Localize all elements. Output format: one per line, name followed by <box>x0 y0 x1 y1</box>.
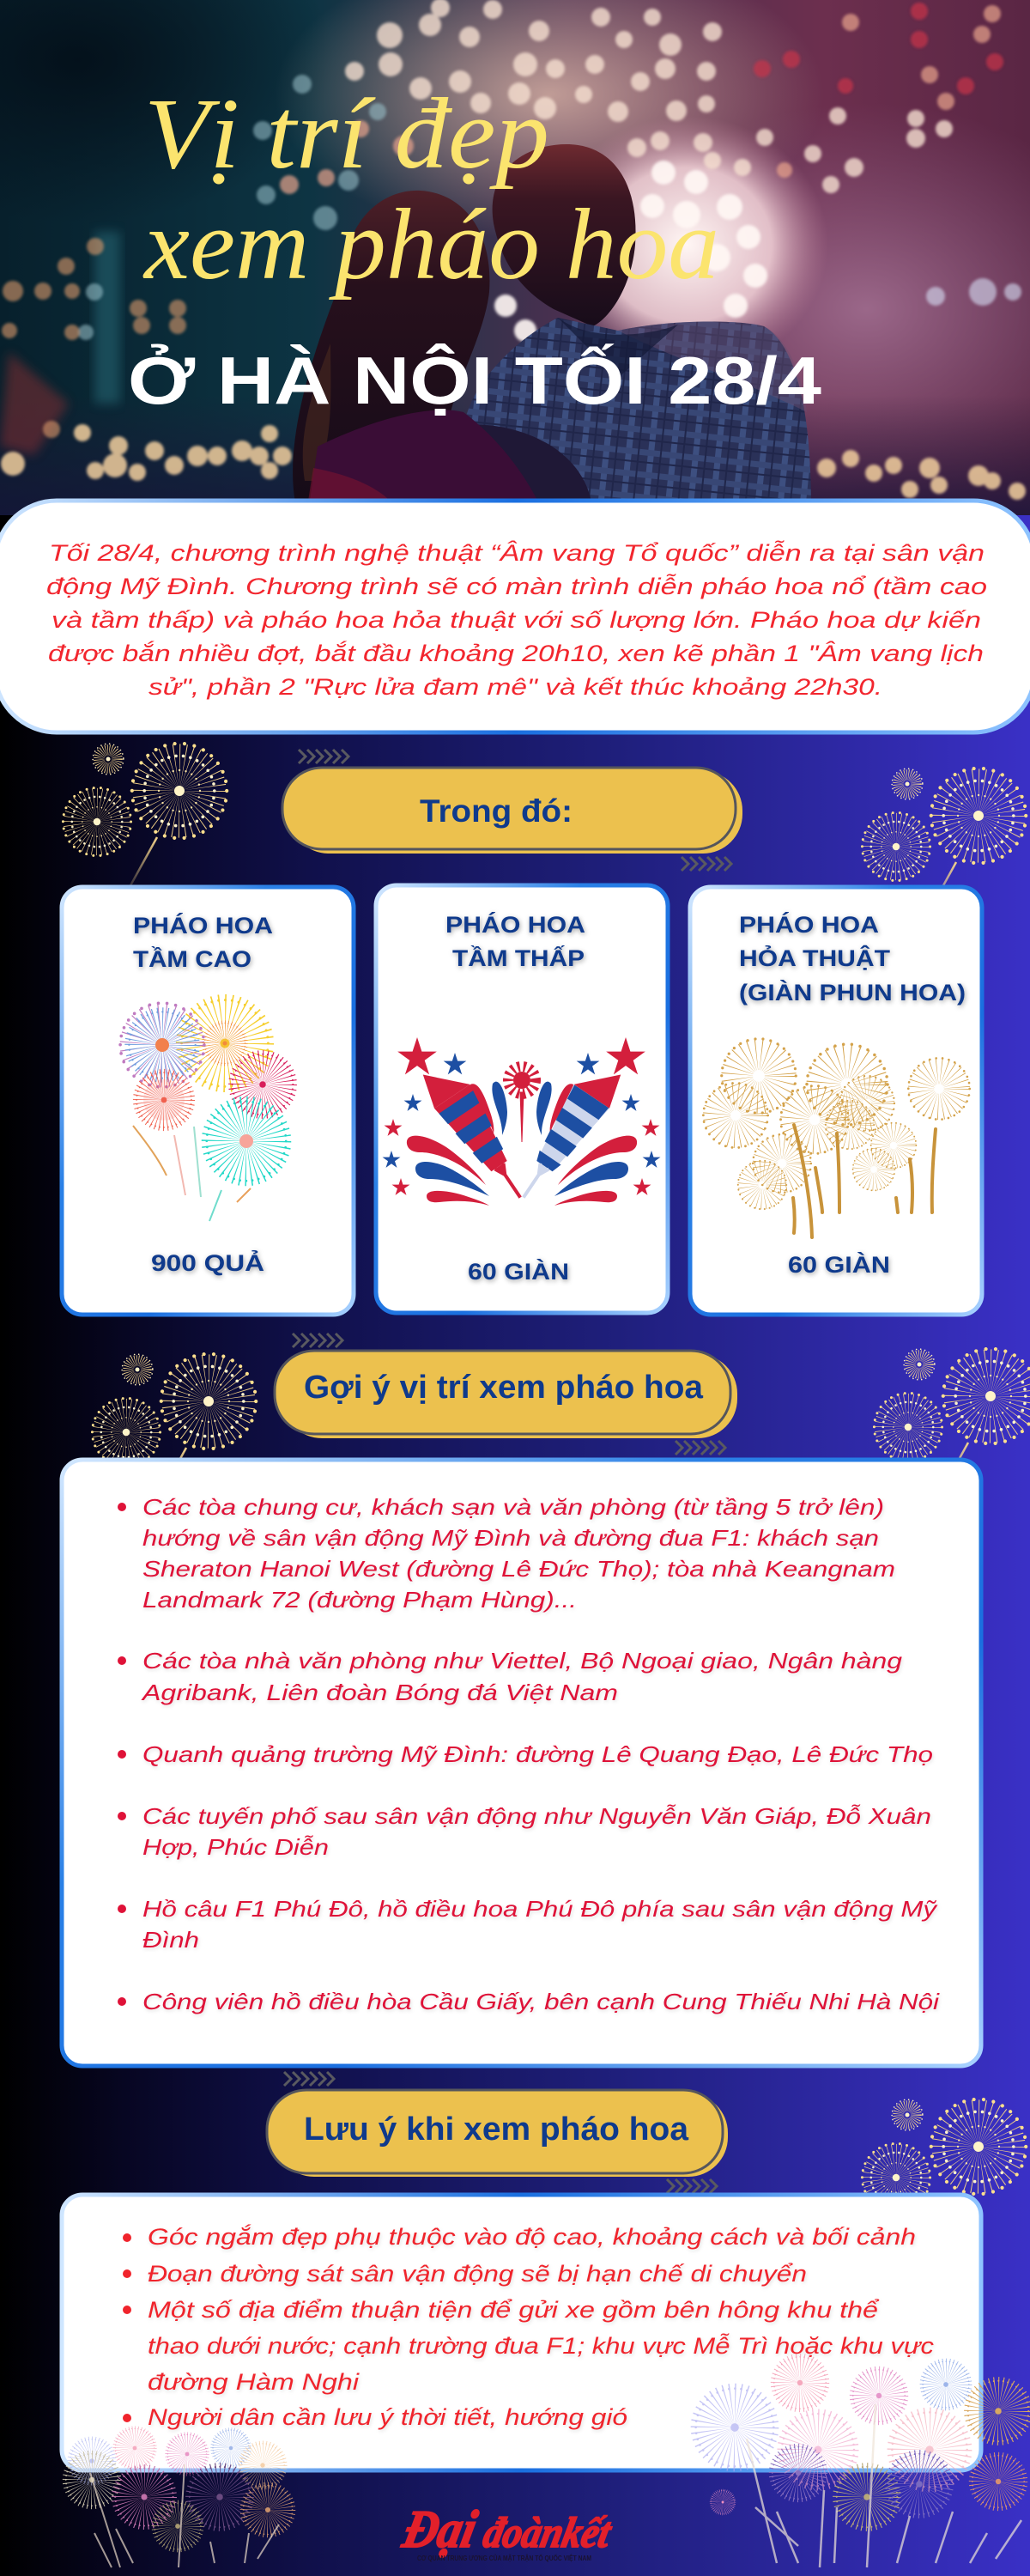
intro text: Tối 28/4, chương trình nghệ thuật “Âm vang Tổ quốc” diễn ra tại sân vận <box>49 539 985 566</box>
firework decoration: left of first pill <box>63 744 227 896</box>
location list: Agribank, Liên đoàn Bóng đá Việt Nam <box>141 1680 618 1705</box>
location list: Các tuyến phố sau sân vận động như Nguyễn Văn Giáp, Đỗ Xuân <box>142 1803 931 1829</box>
man silhouette <box>464 144 811 507</box>
logo: Đại đoàn kết: Đại đoànkết <box>397 2500 618 2559</box>
location list: Quanh quảng trường Mỹ Đình: đường Lê Quang Đạo, Lê Đức Thọ <box>142 1741 933 1767</box>
location list: Sheraton Hanoi West (đường Lê Đức Thọ); tòa nhà Keangnam <box>142 1556 895 1582</box>
card heading: PHÁO HOA <box>133 912 273 939</box>
firework decoration: right of second pill <box>874 1349 1030 1502</box>
location list: Các tòa chung cư, khách sạn và văn phòng (từ tầng 5 trở lên) <box>142 1494 884 1520</box>
intro text: động Mỹ Đình. Chương trình sẽ có màn trình diễn pháo hoa nổ (tầm cao <box>46 573 987 599</box>
fireworks cluster: bottom left <box>66 2428 293 2567</box>
heading text: Gợi ý vị trí xem pháo hoa <box>304 1370 704 1406</box>
panel: pyrotechnic fountain card <box>690 887 982 1315</box>
card heading: (GIÀN PHUN HOA) <box>739 979 966 1005</box>
notes list: thao dưới nước; cạnh trường đua F1; khu vực Mễ Trì hoặc khu vực <box>148 2332 935 2359</box>
notes list: Người dân cần lưu ý thời tiết, hướng gió <box>148 2404 627 2430</box>
logo tagline: CƠ QUAN TRUNG ƯƠNG CỦA MẶT TRẬN TỔ QUỐC VIỆT NAM <box>417 2553 591 2562</box>
card value: 900 QUẢ <box>151 1249 264 1276</box>
card heading: TẦM THẤP <box>452 945 585 971</box>
card heading: PHÁO HOA <box>739 911 879 938</box>
panel: viewing notes <box>62 2195 981 2470</box>
location list: Hợp, Phúc Diễn <box>142 1834 329 1860</box>
intro text <box>46 539 987 700</box>
location list <box>141 1494 940 2014</box>
title: script line 2: xem pháo hoa <box>142 188 719 301</box>
heading text: Lưu ý khi xem pháo hoa <box>304 2111 689 2148</box>
title: white line: Ở HÀ NỘI TỐI 28/4 <box>128 343 821 418</box>
bokeh lights <box>1 0 1026 500</box>
panel: high-altitude fireworks card <box>62 887 354 1315</box>
heading pill: viewing suggestions <box>275 1334 737 1455</box>
notes list: Một số địa điểm thuận tiện để gửi xe gồm bên hông khu thể <box>148 2297 880 2323</box>
notes list: Góc ngắm đẹp phụ thuộc vào độ cao, khoảng cách và bối cảnh <box>148 2223 916 2250</box>
bullets <box>118 1503 126 2006</box>
icon: rockets and stars <box>383 1037 660 1210</box>
notes list: Đoạn đường sát sân vận động sẽ bị hạn chế di chuyển <box>148 2261 807 2287</box>
card value: 60 GIÀN <box>468 1258 569 1285</box>
firework decoration: left of second pill <box>92 1354 256 1507</box>
intro text: và tầm thấp) và pháo hoa hỏa thuật với số lượng lớn. Pháo hoa dự kiến <box>52 607 981 633</box>
card heading: HỎA THUẬT <box>739 944 891 971</box>
intro text: sử", phần 2 "Rực lửa đam mê" và kết thúc khoảng 22h30. <box>148 674 882 700</box>
firework decoration: right of first pill <box>862 769 1026 921</box>
notes list: đường Hàm Nghi <box>148 2369 360 2395</box>
title: script line 1: Vị trí đẹp <box>144 77 549 190</box>
chevrons <box>299 750 731 871</box>
intro text: được bắn nhiều đợt, bắt đầu khoảng 20h10, xen kẽ phần 1 "Âm vang lịch <box>48 640 984 666</box>
hero photo: couple watching fireworks <box>0 0 1030 515</box>
fireworks cluster: bottom right <box>696 2357 1028 2567</box>
heading pill: notes <box>267 2072 728 2193</box>
icon: golden fountains <box>703 1039 970 1237</box>
panel: suggested locations <box>62 1460 981 2066</box>
card heading <box>133 912 273 972</box>
panel: intro <box>0 501 1030 732</box>
panel: low-altitude fireworks card <box>376 885 668 1313</box>
location list: Hồ câu F1 Phú Đô, hồ điều hoa Phú Đô phía sau sân vận động Mỹ <box>142 1896 938 1922</box>
icon: colourful fireworks <box>120 1000 293 1221</box>
heading text: Trong đó: <box>420 793 573 829</box>
card heading <box>445 911 585 971</box>
location list: Công viên hồ điều hòa Cầu Giấy, bên cạnh Cung Thiếu Nhi Hà Nội <box>142 1989 940 2014</box>
heading pill: Trong đó <box>282 750 742 871</box>
card value: 60 GIÀN <box>788 1251 890 1278</box>
firework decoration: right of third pill <box>862 2099 1026 2252</box>
location list: Các tòa nhà văn phòng như Viettel, Bộ Ngoại giao, Ngân hàng <box>142 1648 903 1674</box>
card heading: TẦM CAO <box>133 945 251 972</box>
location list: Landmark 72 (đường Phạm Hùng)... <box>142 1587 577 1613</box>
card heading <box>739 911 966 1005</box>
notes list <box>148 2223 935 2430</box>
card heading: PHÁO HOA <box>445 911 585 938</box>
location list: Đình <box>142 1927 199 1953</box>
chevrons <box>293 1334 725 1455</box>
chevrons <box>284 2072 717 2193</box>
location list: hướng về sân vận động Mỹ Đình và đường đua F1: khách sạn <box>142 1525 879 1551</box>
bullets <box>123 2233 131 2422</box>
woman silhouette <box>293 191 541 507</box>
